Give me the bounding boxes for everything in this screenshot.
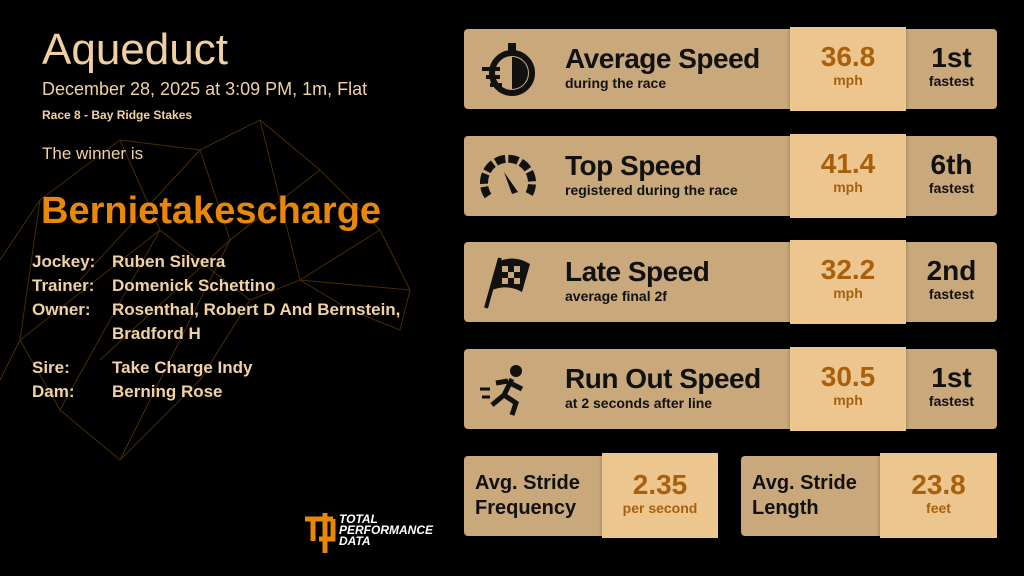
value: 30.5: 30.5 <box>821 361 875 392</box>
card: run out speed: 1st <box>931 362 972 393</box>
card: average speed: during the race <box>565 75 666 91</box>
connections: Take Charge Indy <box>112 358 252 377</box>
card: stride length: Length <box>752 497 819 519</box>
value: 41.4: mph <box>833 179 863 195</box>
logo: PERFORMANCE <box>339 523 433 537</box>
value: 23.8: feet <box>926 500 951 516</box>
race name: Race 8 - Bay Ridge Stakes <box>42 108 192 122</box>
card: run out speed: fastest <box>929 393 974 409</box>
logo <box>305 512 434 553</box>
value: 41.4 <box>790 134 906 218</box>
value: 32.2 <box>790 240 906 324</box>
icon: checkered flag <box>484 258 530 308</box>
card: run out speed <box>464 349 997 429</box>
card: stride frequency: Avg. Stride <box>475 472 580 494</box>
icon: runner <box>480 365 524 416</box>
connections <box>32 252 400 401</box>
connections: Bradford H <box>112 324 201 343</box>
card: late speed: Late Speed <box>565 256 709 287</box>
card: stride length: Avg. Stride <box>752 472 857 494</box>
card: stride frequency: Frequency <box>475 497 576 519</box>
value: 41.4: 41.4 <box>821 148 875 179</box>
connections: Dam: <box>32 382 75 401</box>
winner name: Bernietakescharge <box>41 190 381 232</box>
connections: Owner: <box>32 300 91 319</box>
connections: Jockey: <box>32 252 95 271</box>
value: 23.8: 23.8 <box>911 469 966 500</box>
connections: Domenick Schettino <box>112 276 275 295</box>
value: 36.8: 36.8 <box>821 41 875 72</box>
logo: TOTAL <box>339 512 378 526</box>
card: stride frequency <box>464 456 718 536</box>
card: top speed: 6th <box>930 149 972 180</box>
connections: Ruben Silvera <box>112 252 225 271</box>
card: late speed: fastest <box>929 286 974 302</box>
card: late speed: average final 2f <box>565 288 667 304</box>
title: Aqueduct <box>42 25 228 74</box>
card: top speed: fastest <box>929 180 974 196</box>
winner intro: The winner is <box>42 144 143 163</box>
card: late speed: 2nd <box>927 255 976 286</box>
card: top speed <box>464 136 997 216</box>
card: run out speed: at 2 seconds after line <box>565 395 712 411</box>
value: 36.8: mph <box>833 72 863 88</box>
value: 32.2: mph <box>833 285 863 301</box>
card: average speed <box>464 29 997 109</box>
value: 23.8 <box>880 453 997 538</box>
date line: December 28, 2025 at 3:09 PM, 1m, Flat <box>42 79 367 99</box>
value: 30.5 <box>790 347 906 431</box>
value: 32.2: 32.2 <box>821 254 875 285</box>
connections: Sire: <box>32 358 70 377</box>
connections: Berning Rose <box>112 382 223 401</box>
connections: Trainer: <box>32 276 94 295</box>
card: top speed: registered during the race <box>565 182 738 198</box>
value: 30.5: mph <box>833 392 863 408</box>
background network horse <box>0 120 410 460</box>
icon: stopwatch <box>482 43 535 96</box>
card: stride length <box>741 456 997 536</box>
card: average speed: 1st <box>931 42 972 73</box>
card: late speed <box>464 242 997 322</box>
value: 2.35 <box>602 453 718 538</box>
value: 2.35: per second <box>623 500 697 516</box>
card: average speed: fastest <box>929 73 974 89</box>
value: 2.35: 2.35 <box>633 469 687 500</box>
card: average speed: Average Speed <box>565 43 760 74</box>
value: 36.8 <box>790 27 906 111</box>
connections: Rosenthal, Robert D And Bernstein, <box>112 300 400 319</box>
card: run out speed: Run Out Speed <box>565 363 761 394</box>
icon: speedometer <box>480 154 536 198</box>
card: top speed: Top Speed <box>565 150 702 181</box>
logo: DATA <box>339 534 371 548</box>
